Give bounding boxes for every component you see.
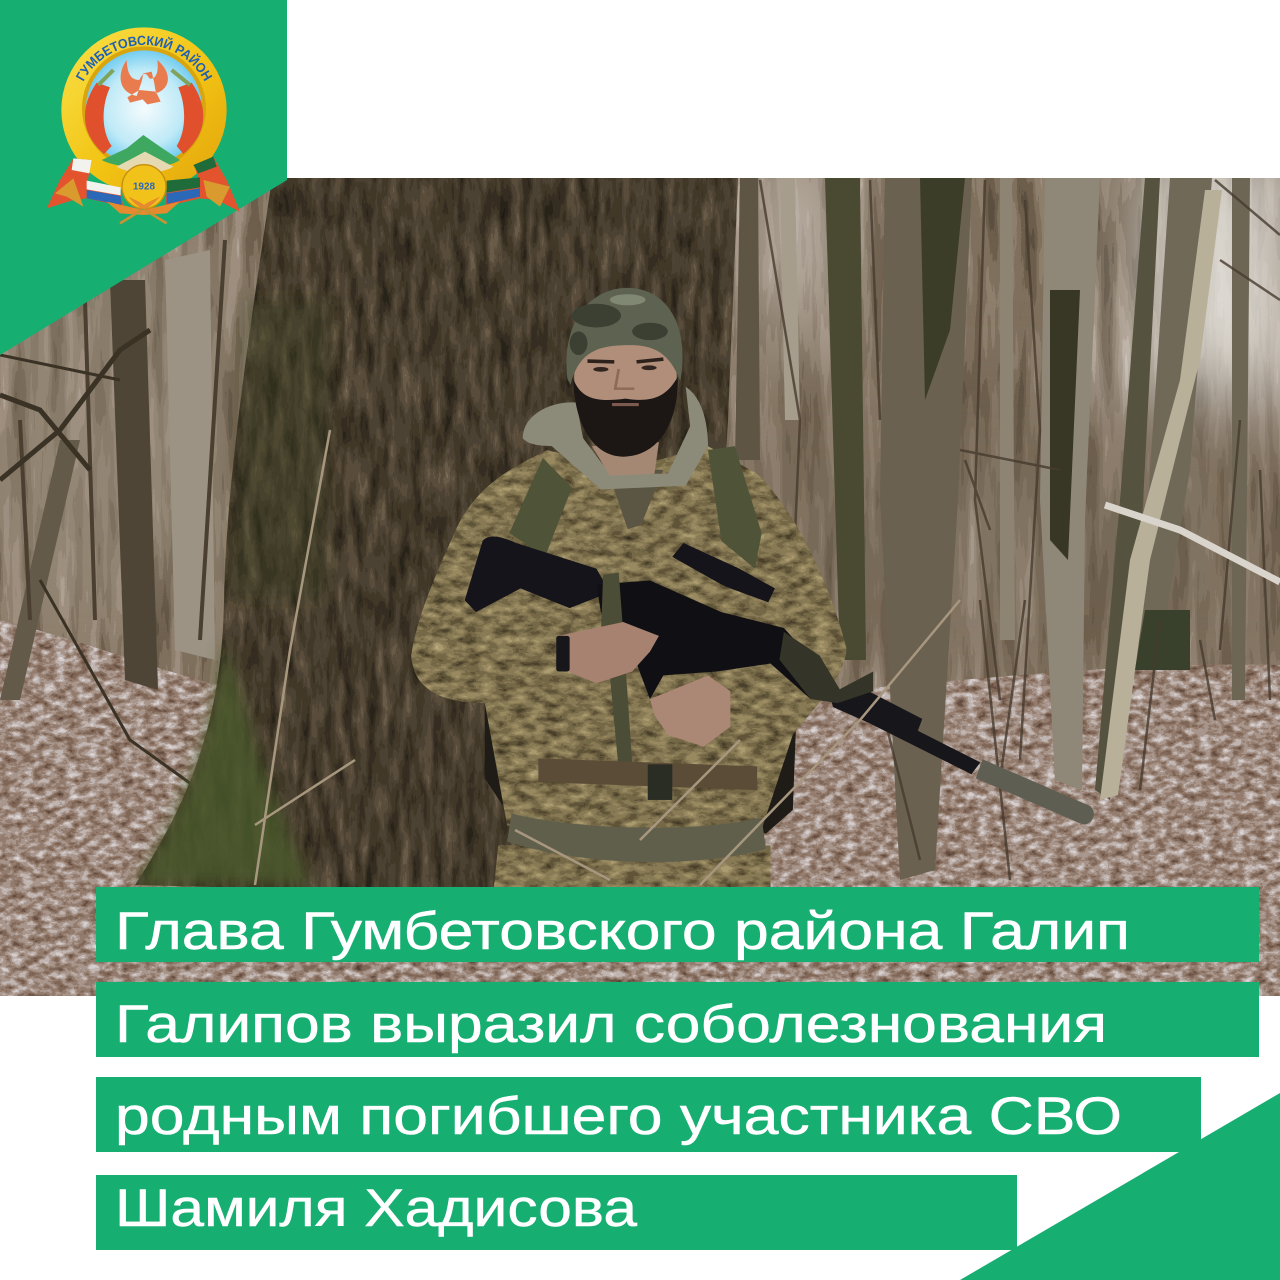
backpack and lower gear [485, 691, 797, 834]
left ribbon wheat [55, 178, 83, 207]
belt pouch [648, 764, 672, 800]
left ribbon white and blue bands [72, 158, 121, 195]
medallion wheat ornament [128, 197, 160, 210]
forest background [0, 178, 1280, 690]
rifle barrel [829, 691, 980, 774]
right ribbon wheat [203, 180, 230, 207]
emblem: Gumbet district coat of arms [46, 27, 240, 224]
eyes and brows [587, 359, 663, 389]
face [574, 345, 677, 400]
shoulder strap left [509, 458, 572, 557]
snowy leaf-covered ground [0, 620, 1280, 996]
caption line 1: Глава Гумбетовского района Галип [115, 902, 1130, 961]
moss on trunk [135, 300, 330, 885]
caption line 2: Галипов выразил соболезнования [115, 995, 1107, 1054]
shoulder strap right [708, 446, 762, 569]
caption line 4: Шамиля Хадисова [115, 1179, 638, 1238]
knit camo hat [566, 288, 683, 385]
lips [612, 403, 639, 406]
main oak trunk [135, 178, 738, 900]
rifle stock [465, 537, 610, 612]
year: 1928 [133, 181, 156, 192]
blue ribbon bands [87, 188, 200, 205]
sky disc [86, 50, 202, 166]
beard [573, 377, 678, 457]
rifle receiver and handguard [598, 580, 810, 699]
year medallion [122, 165, 166, 209]
left wreath [85, 83, 112, 154]
caption line 1 [96, 887, 1259, 962]
fallen white branch [1105, 505, 1280, 582]
hood [523, 387, 708, 490]
right wreath [177, 83, 203, 154]
chest shirt and zipper [614, 470, 664, 529]
fine bare branches right [760, 180, 1280, 880]
rifle suppressor [976, 759, 1094, 824]
photo: soldier in winter forest [0, 150, 1280, 996]
mountains [102, 135, 180, 167]
background tree trunks right [735, 178, 1250, 880]
lower hand [650, 675, 730, 747]
belt [538, 758, 757, 790]
caption line 3 [96, 1077, 1201, 1152]
lower laurel [107, 202, 180, 215]
gold ring [61, 27, 227, 193]
neck [592, 442, 659, 476]
watch [556, 636, 570, 671]
soldier [411, 288, 1094, 889]
bottom-right green triangle [960, 1093, 1280, 1280]
eagle [121, 60, 168, 104]
top-left green corner panel [0, 0, 287, 355]
jacket hem [507, 814, 766, 862]
hat blotches [570, 294, 668, 355]
right flag ribbon [165, 157, 240, 212]
caption line 3: родным погибшего участника СВО [115, 1087, 1122, 1146]
upper hand [558, 622, 659, 683]
sling [601, 573, 632, 770]
ring inner edge [82, 46, 206, 170]
rifle scope [672, 543, 775, 602]
right ribbon green and blue bands [167, 157, 217, 193]
headline: caption bars [96, 887, 1259, 1250]
lower crossed stems [120, 210, 167, 223]
foreground thin branches [255, 430, 960, 885]
ring lettering: ГУМБЕТОВСКИЙ РАЙОН [76, 36, 212, 82]
caption line 2 [96, 982, 1259, 1057]
front sling wrap [779, 632, 873, 703]
background tree trunks left [0, 240, 255, 830]
trousers [494, 845, 771, 889]
jacket [411, 446, 846, 830]
valley [117, 152, 173, 173]
caption line 4 [96, 1175, 1017, 1250]
wreath leaves [98, 70, 190, 85]
left flag ribbon [47, 158, 123, 208]
pale sky haze [0, 150, 1280, 680]
